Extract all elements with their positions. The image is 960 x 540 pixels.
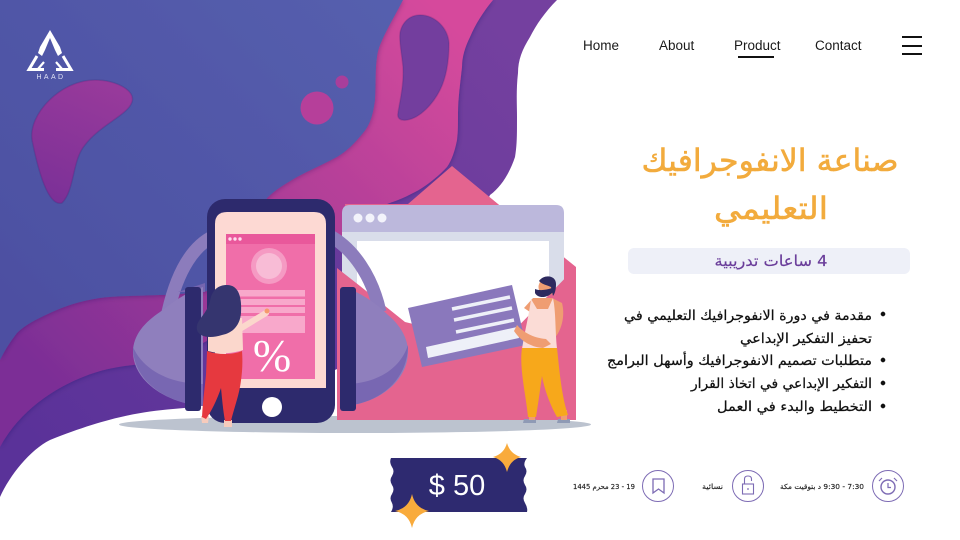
icon: hamburger menu <box>902 36 922 55</box>
navigation: About <box>659 38 695 53</box>
navigation <box>583 38 862 58</box>
navigation: Product <box>734 38 781 53</box>
subtitle pill: 4 ساعات تدريبية <box>714 252 828 270</box>
illustration ground shadow <box>119 416 591 433</box>
title <box>642 143 898 227</box>
illustration: envelope front flap <box>337 267 576 420</box>
price ticket <box>390 458 527 512</box>
logo <box>29 30 71 81</box>
circle: large magenta dot <box>300 92 334 124</box>
footer: date: 19 - 23 محرم 1445 <box>573 483 635 491</box>
background: magenta wave <box>0 0 493 447</box>
illustration: smartphone: % <box>253 330 291 381</box>
title: التعليمي <box>714 191 828 227</box>
illustration: browser window <box>342 205 564 341</box>
illustration: man <box>514 276 570 423</box>
subtitle pill <box>628 248 910 274</box>
background: outer purple wave <box>0 0 557 497</box>
bullet list: تحفيز التفكير الإبداعي <box>740 331 872 347</box>
illustration: smartphone <box>207 199 335 423</box>
background: blue wave <box>0 0 403 360</box>
illustration: envelope back <box>345 166 576 420</box>
logo: HAAD <box>36 74 66 81</box>
bullet list: متطلبات تصميم الانفوجرافيك وأسهل البرامج <box>607 351 872 369</box>
footer: time <box>780 470 904 502</box>
bullet list: مقدمة في دورة الانفوجرافيك التعليمي في <box>624 308 872 324</box>
illustration: woman <box>197 285 270 427</box>
icon: star top right <box>493 443 521 472</box>
footer: date <box>573 470 674 502</box>
bullet list: التفكير الإبداعي في اتخاذ القرار <box>690 376 872 392</box>
navigation: Home <box>583 38 619 53</box>
illustration: purple card <box>408 285 526 367</box>
blob: purple drop in magenta wave <box>398 15 449 120</box>
price ticket: $ 50 <box>429 470 485 502</box>
navigation: Contact <box>815 38 862 53</box>
blob: left magenta drop <box>32 80 132 203</box>
icon: star bottom left <box>395 494 429 528</box>
bullet list <box>607 308 885 415</box>
footer: time: 7:30 - 9:30 د بتوقيت مكة <box>780 483 864 491</box>
illustration: headphones <box>133 236 408 411</box>
title: صناعة الانفوجرافيك <box>642 143 898 179</box>
circle: small magenta dot <box>336 76 348 88</box>
bullet list: التخطيط والبدء في العمل <box>717 399 872 415</box>
footer: access <box>702 470 764 502</box>
footer: access: نسائية <box>702 483 723 491</box>
